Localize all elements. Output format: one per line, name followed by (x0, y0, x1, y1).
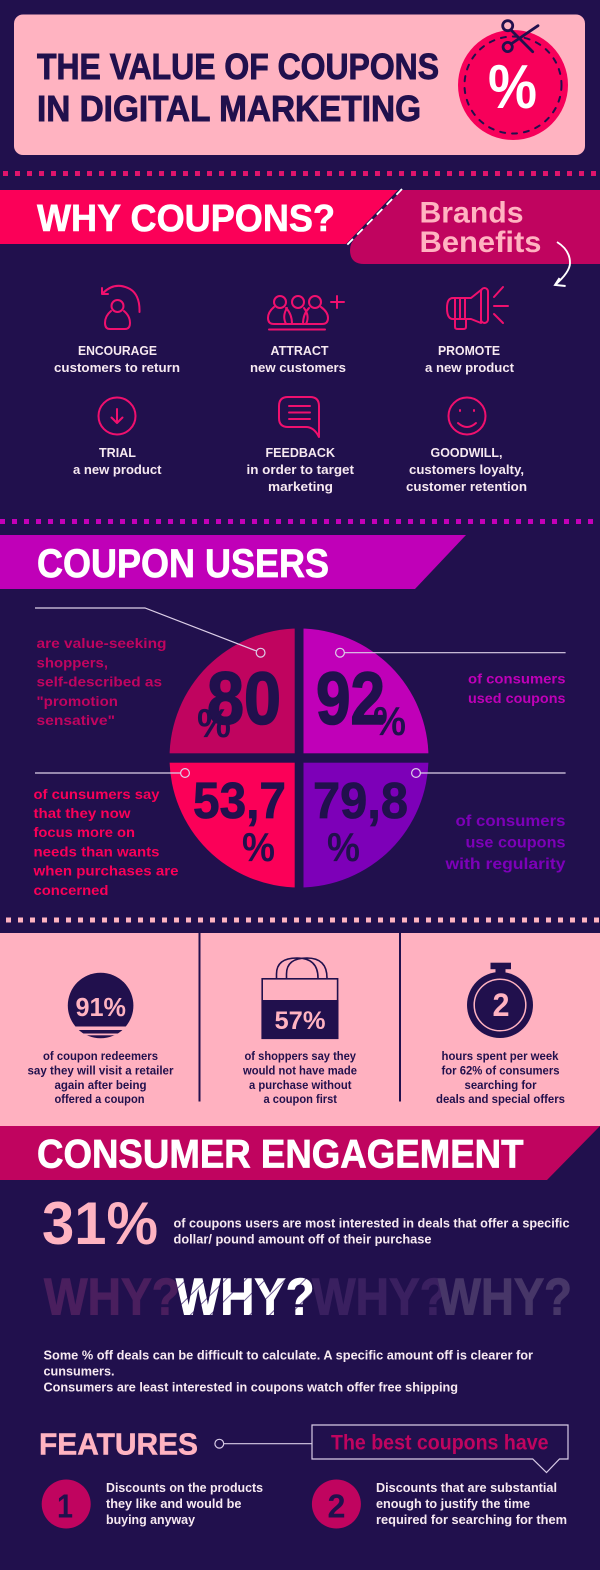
text: value-seeking shoppers: sensative" (36, 712, 115, 728)
pie slice: 79,8% (304, 763, 430, 889)
text: value-seeking shoppers (36, 635, 166, 728)
icon: scissors (503, 21, 538, 52)
dotted divider (3, 171, 600, 176)
text: trial (73, 446, 162, 477)
pie slice: 80%: % (197, 700, 231, 746)
text: retailer stat: offered a coupon (54, 1092, 144, 1106)
why row: WHY? (44, 1268, 180, 1326)
why row (44, 1268, 572, 1326)
pie slice: 79,8%: 79,8 (313, 772, 408, 829)
text: goodwill: GOODWILL, (430, 446, 502, 460)
pie slice: 92%: 92 (316, 657, 385, 740)
text: 31% description: dollar/ pound amount off of their purchase (174, 1232, 432, 1246)
arrow (555, 242, 570, 286)
text: goodwill: customers loyalty, (409, 463, 524, 477)
why row: WHY? (312, 1268, 448, 1326)
feature 1: buying anyway (106, 1512, 196, 1527)
text: purchase stat: a purchase without (249, 1078, 352, 1092)
text: used coupons: used coupons (468, 690, 566, 706)
text: needs than wants (32, 786, 179, 898)
text: attract: new customers (250, 361, 346, 375)
text: use with regularity: of consumers (456, 813, 566, 830)
title (37, 46, 439, 129)
icon: shopping bag 57%: 57% (274, 1007, 326, 1035)
icon: attract (268, 296, 344, 330)
feature 1 (42, 1480, 263, 1528)
text: feedback: FEEDBACK (266, 446, 335, 460)
feature 1: they like and would be (106, 1496, 242, 1511)
text: retailer stat: of coupon redeemers (43, 1049, 158, 1063)
text: trial: TRIAL (99, 446, 136, 460)
text: use with regularity (444, 813, 566, 873)
icon: trial (98, 398, 136, 434)
text: explanation: Consumers are least interested in coupons watch offer free shipping (44, 1380, 458, 1394)
heading: consumer engagement: CONSUMER ENGAGEMENT (37, 1132, 524, 1176)
text: needs than wants: needs than wants (34, 844, 160, 860)
text: promote: PROMOTE (438, 344, 500, 358)
feature 2 (312, 1480, 567, 1528)
heading: coupon users (0, 535, 466, 589)
text: value-seeking shoppers: self-described as (36, 674, 162, 690)
text: feedback: in order to target (246, 463, 355, 477)
text: use with regularity: use coupons (466, 834, 566, 852)
text: attract (250, 344, 346, 375)
why row: WHY? (176, 1268, 314, 1326)
text: used coupons (468, 670, 566, 706)
feature 1: Discounts on the products (106, 1480, 263, 1495)
icon: feedback (279, 397, 319, 437)
text: feedback (246, 446, 355, 494)
icon: stopwatch: 2 (492, 987, 510, 1023)
text: value-seeking shoppers: are value-seeking (36, 635, 166, 651)
icon: coupon circle with percent (458, 30, 568, 140)
text: trial: a new product (73, 463, 162, 477)
text: hours stat: hours spent per week (442, 1049, 559, 1063)
text: value-seeking shoppers: shoppers, (36, 654, 108, 670)
text: explanation (44, 1348, 533, 1394)
icon: stopwatch (467, 963, 533, 1038)
text: encourage (54, 344, 180, 375)
text: 31% description (174, 1216, 570, 1246)
text: explanation: Some % off deals can be difficult to calculate. A specific amount off is clearer for (44, 1348, 533, 1362)
text: needs than wants: concerned (34, 882, 108, 898)
text: encourage: ENCOURAGE (78, 344, 157, 358)
text: purchase stat (242, 1049, 357, 1106)
text: purchase stat: would not have made (242, 1064, 357, 1078)
pie slice: 92%: % (373, 698, 406, 744)
icon: 91% badge (65, 973, 137, 1038)
callout: the best coupons have: The best coupons have (331, 1431, 548, 1454)
text: needs than wants: that they now (34, 805, 131, 821)
text: 31% description: of coupons users are most interested in deals that offer a specific (174, 1216, 570, 1230)
icon: 91% badge: 91% (76, 992, 126, 1022)
stat: 31%: 31% (42, 1190, 158, 1257)
pie slice: 53,7%: 53,7 (193, 772, 286, 829)
text: retailer stat: again after being (54, 1078, 146, 1092)
pie chart (169, 628, 430, 889)
callout lines (35, 608, 566, 777)
dotted divider (6, 918, 600, 922)
heading: coupon users: COUPON USERS (37, 542, 329, 586)
text: goodwill: customer retention (406, 480, 527, 494)
icon: shopping bag 57% (262, 958, 338, 1039)
text: encourage: customers to return (54, 361, 180, 375)
panel: brands benefits tab (350, 190, 600, 264)
heading: features: FEATURES (39, 1426, 198, 1461)
text: explanation: cunsumers. (44, 1364, 114, 1378)
text: promote: a new product (425, 361, 515, 375)
text: feedback: marketing (268, 480, 333, 494)
feature 1: 1 (57, 1487, 73, 1524)
title: THE VALUE OF COUPONS (37, 46, 439, 87)
text: retailer stat: say they will visit a retailer (28, 1064, 174, 1078)
header panel (14, 14, 585, 155)
text: attract: ATTRACT (270, 344, 329, 358)
text: goodwill (406, 446, 527, 494)
text: hours stat: searching for (464, 1078, 537, 1092)
pie slice: 92% (304, 628, 430, 753)
pie slice: 53,7% (169, 763, 295, 889)
panel: brands benefits tab: Benefits (420, 226, 542, 259)
text: purchase stat: of shoppers say they (244, 1049, 356, 1063)
panel: shopper statistics (0, 933, 600, 1126)
text: hours stat: for 62% of consumers (442, 1064, 560, 1078)
text: needs than wants: of cunsumers say (34, 786, 160, 802)
text: purchase stat: a coupon first (264, 1092, 337, 1106)
icon: encourage (102, 286, 140, 329)
text: retailer stat (28, 1049, 174, 1106)
text: needs than wants: focus more on (34, 824, 135, 840)
pie slice: 80% (169, 628, 295, 753)
heading: why coupons: WHY COUPONS? (37, 198, 335, 240)
icon: goodwill smiley (448, 398, 486, 434)
feature 2: enough to justify the time (376, 1496, 530, 1511)
pie slice: 80%: 80 (207, 657, 281, 740)
pie slice: 53,7%: % (242, 824, 275, 870)
feature 2: required for searching for them (376, 1512, 567, 1527)
panel: brands benefits tab: Brands (420, 196, 524, 230)
text: value-seeking shoppers: "promotion (36, 693, 118, 709)
title: IN DIGITAL MARKETING (37, 88, 421, 129)
dotted divider (0, 519, 600, 524)
text: use with regularity: with regularity (444, 856, 566, 873)
text: used coupons: of consumers (468, 670, 566, 686)
why row: WHY? (438, 1268, 572, 1326)
feature 2: 2 (328, 1487, 346, 1524)
icon: promote (447, 287, 508, 329)
text: hours stat: deals and special offers (436, 1092, 565, 1106)
feature 2: Discounts that are substantial (376, 1480, 557, 1495)
callout: the best coupons have (215, 1425, 568, 1472)
text: promote (425, 344, 515, 375)
icon: coupon circle with percent: % (488, 53, 537, 122)
heading: why coupons (0, 190, 398, 244)
text: hours stat (436, 1049, 565, 1106)
pie slice: 79,8%: % (327, 824, 360, 870)
text: needs than wants: when purchases are (32, 862, 179, 878)
